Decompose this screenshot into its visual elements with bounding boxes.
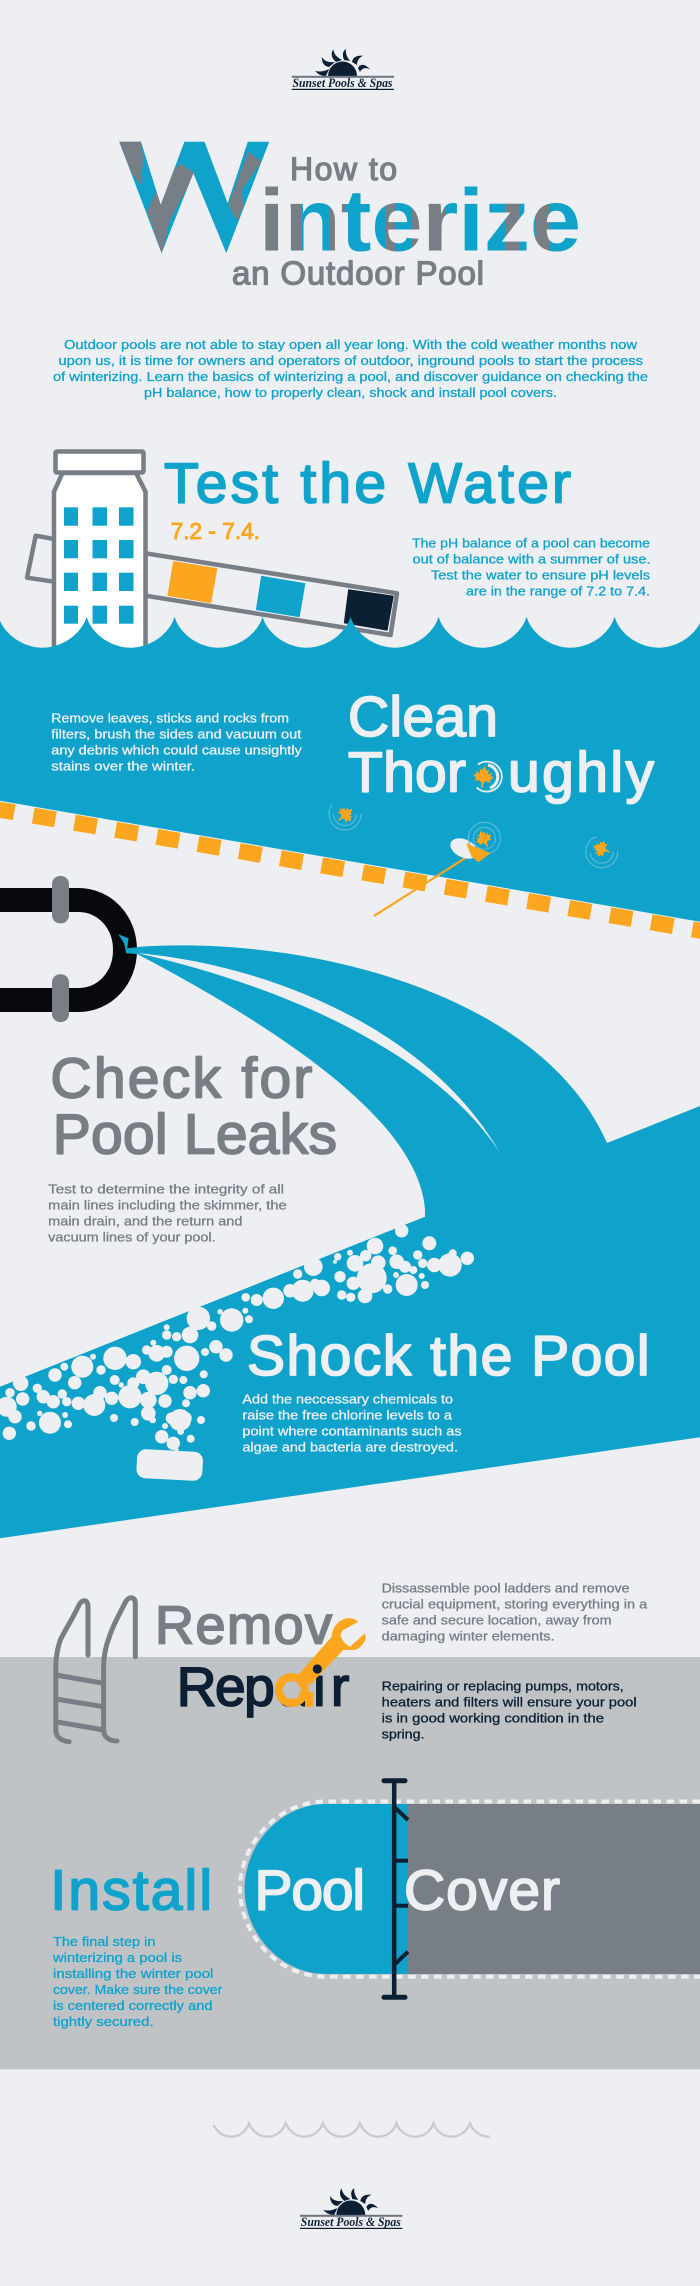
- title letter W: [119, 142, 270, 254]
- text: install pool cover: installing the winter pool: [53, 1966, 214, 1981]
- text: install pool cover: [52, 1934, 223, 2029]
- ph range callout: 7.2 - 7.4.: [170, 518, 260, 544]
- icon: wrench: [275, 1618, 366, 1707]
- icon: leaking pipe: [0, 876, 138, 1022]
- text: clean thoroughly: [51, 710, 302, 773]
- heading: repair: ir: [313, 1656, 349, 1718]
- text: install pool cover: is centered correctly and: [53, 1998, 212, 2013]
- icon: floating leaf left: [329, 798, 361, 830]
- title: an Outdoor Pool: [232, 254, 484, 291]
- heading: install pool cover: Pool: [254, 1858, 365, 1922]
- text: clean thoroughly: any debris which could cause unsightly: [51, 742, 302, 757]
- heading: clean thoroughly: Thor: [348, 741, 466, 805]
- text: check for pool leaks: vacuum lines of your pool.: [48, 1229, 216, 1244]
- illustration: pool with cover: [240, 1781, 700, 1997]
- text: repair: Repairing or replacing pumps, motors,: [382, 1678, 624, 1693]
- heading: repair: Rep: [177, 1656, 275, 1718]
- decorative wave line: [213, 2123, 490, 2137]
- heading: install pool cover: Install: [50, 1858, 212, 1922]
- text: remove: crucial equipment, storing everything in a: [382, 1596, 648, 1611]
- text: shock the pool: [242, 1391, 462, 1454]
- logo: bottom: [300, 2188, 402, 2229]
- text: test the water: [412, 535, 651, 598]
- text: check for pool leaks: [48, 1181, 287, 1244]
- icon: chlorine tablet: [136, 1449, 203, 1481]
- heading: repair: a: [278, 1656, 309, 1718]
- pool edge tiles: [0, 801, 700, 941]
- heading: clean thoroughly: o: [473, 741, 505, 805]
- heading: check for pool leaks: Pool Leaks: [53, 1102, 337, 1166]
- text: remove: Dissassemble pool ladders and remove: [382, 1580, 630, 1595]
- text: test the water: out of balance with a summer of use.: [412, 551, 650, 566]
- logo: top: [292, 49, 394, 90]
- text: remove: damaging winter elements.: [382, 1628, 554, 1643]
- icon: leaf in the letter o: [467, 757, 507, 797]
- heading: clean thoroughly: ughly: [508, 741, 654, 805]
- text: test the water: The pH balance of a pool can become: [412, 535, 650, 550]
- title: How to: [290, 151, 397, 187]
- text: check for pool leaks: Test to determine the integrity of all: [48, 1181, 284, 1196]
- text: remove: [382, 1580, 648, 1643]
- intro text: pH balance, how to properly clean, shock and install pool covers.: [144, 385, 557, 400]
- text: install pool cover: The final step in: [53, 1934, 155, 1949]
- intro text: of winterizing. Learn the basics of winterizing a pool, and discover guidance on checking the: [53, 369, 648, 384]
- heading: clean thoroughly: [348, 685, 654, 805]
- heading: clean thoroughly: Clean: [348, 685, 498, 749]
- text: shock the pool: Add the neccessary chemicals to: [242, 1391, 453, 1406]
- intro text: Outdoor pools are not able to stay open all year long. With the cold weather months now: [64, 337, 638, 352]
- text: repair: is in good working condition in the: [382, 1710, 604, 1725]
- text: repair: heaters and filters will ensure your pool: [382, 1694, 637, 1709]
- text: clean thoroughly: filters, brush the sides and vacuum out: [51, 726, 302, 741]
- panel: leak stream and shock pool water: [0, 945, 700, 1538]
- text: test the water: Test the water to ensure pH levels: [431, 567, 651, 582]
- text: test the water: are in the range of 7.2 to 7.4.: [466, 583, 650, 598]
- bubbles: [0, 1224, 474, 1452]
- text: install pool cover: winterizing a pool is: [52, 1950, 183, 1965]
- heading: remove: Remov: [155, 1596, 332, 1656]
- text: shock the pool: raise the free chlorine levels to a: [242, 1407, 453, 1422]
- text: shock the pool: point where contaminants such as: [242, 1423, 462, 1438]
- panel: grey band: [0, 1657, 700, 2069]
- logo: top: Sunset Pools & Spas: [292, 76, 393, 90]
- icon: floating leaf right: [586, 836, 618, 868]
- heading: install pool cover: [50, 1858, 560, 1922]
- text: remove: safe and secure location, away from: [382, 1612, 612, 1627]
- heading: check for pool leaks: Check for: [50, 1046, 312, 1110]
- heading: test the water: Test the Water: [164, 452, 571, 516]
- intro text: [53, 337, 648, 400]
- text: clean thoroughly: stains over the winter.: [51, 758, 195, 773]
- logo: bottom: Sunset Pools & Spas: [301, 2215, 401, 2229]
- text: repair: spring.: [382, 1726, 424, 1741]
- text: clean thoroughly: Remove leaves, sticks and rocks from: [51, 710, 289, 725]
- heading: shock the pool: Shock the Pool: [247, 1324, 650, 1388]
- heading: check for pool leaks: [50, 1046, 337, 1166]
- text: check for pool leaks: main lines including the skimmer, the: [48, 1197, 287, 1212]
- text: install pool cover: cover. Make sure the cover: [53, 1982, 223, 1997]
- text: install pool cover: tightly secured.: [53, 2014, 154, 2029]
- text: shock the pool: algae and bacteria are destroyed.: [242, 1439, 458, 1454]
- stream highlight: [137, 953, 500, 1153]
- text: repair: [382, 1678, 637, 1741]
- title: interize: [259, 171, 581, 270]
- icon: pool ladder: [56, 1598, 135, 1742]
- icon: test kit bottle: [27, 452, 146, 660]
- title: [115, 138, 581, 291]
- text: check for pool leaks: main drain, and the return and: [48, 1213, 242, 1228]
- icon: test strip: [146, 553, 397, 635]
- intro text: upon us, it is time for owners and operators of outdoor, inground pools to start the process: [58, 353, 644, 368]
- panel: water with scalloped waves: [0, 617, 700, 922]
- heading: install pool cover: Cover: [404, 1858, 560, 1922]
- icon: skimmer net with leaf: [374, 822, 500, 916]
